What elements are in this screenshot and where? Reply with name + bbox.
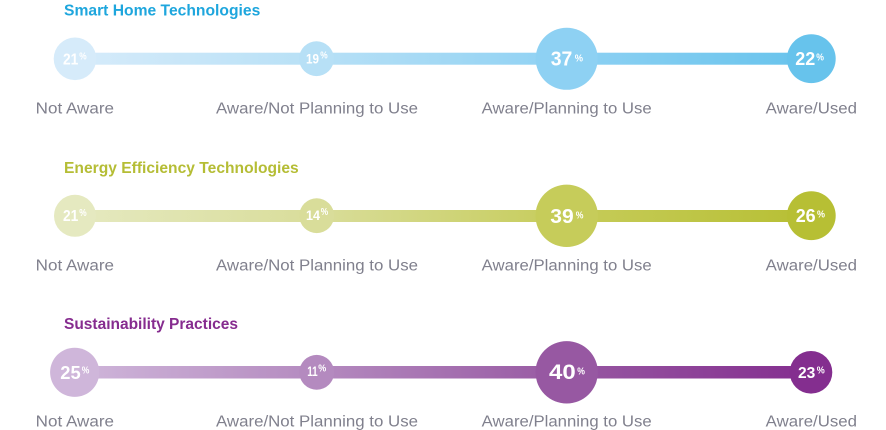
panel: Energy Efficiency Technologies — [36, 160, 857, 274]
node: Aware/Planning to Use 39%: 39 — [550, 205, 574, 228]
node: Aware/Used 23%: 23 — [798, 365, 815, 382]
node: Aware/Used 22% — [787, 34, 836, 83]
node: Aware/Planning to Use 40%: % — [577, 367, 585, 378]
node: Aware/Not Planning to Use 14%: 14 — [306, 207, 320, 223]
label: Aware/Used: Aware/Used — [766, 101, 857, 118]
node: Not Aware 21%: % — [79, 51, 87, 62]
panel: Smart Home Technologies — [36, 3, 857, 118]
node: Aware/Not Planning to Use 14%: % — [321, 207, 328, 218]
node: Aware/Used 26% — [787, 191, 836, 240]
node: Not Aware 25% — [50, 348, 99, 397]
node: Aware/Not Planning to Use 19%: % — [320, 50, 328, 61]
node: Aware/Planning to Use 40%: 40 — [549, 361, 576, 384]
node: Not Aware 21%: % — [79, 208, 87, 219]
node: Aware/Not Planning to Use 14% — [299, 198, 334, 233]
node: Aware/Not Planning to Use 11%: 11 — [307, 363, 318, 379]
panel: Sustainability Practices — [36, 316, 857, 430]
node: Aware/Planning to Use 39%: % — [576, 210, 583, 221]
node: Aware/Not Planning to Use 11%: % — [318, 363, 326, 374]
label: Aware/Planning to Use: Aware/Planning to Use — [482, 257, 652, 274]
node: Aware/Used 23%: % — [817, 365, 825, 376]
label: Aware/Not Planning to Use: Aware/Not Planning to Use — [216, 257, 418, 274]
node: Aware/Used 26%: 26 — [796, 206, 816, 226]
node: Not Aware 21%: 21 — [63, 208, 79, 225]
node: Aware/Planning to Use 37%: 37 — [551, 49, 572, 71]
node: Aware/Used 23% — [790, 351, 832, 394]
node: Aware/Planning to Use 39% — [536, 185, 598, 247]
heading: Energy Efficiency Technologies: Energy Efficiency Technologies — [64, 160, 299, 177]
label: Aware/Used: Aware/Used — [766, 257, 857, 274]
node: Aware/Used 22%: 22 — [795, 49, 815, 69]
node: Aware/Planning to Use 37% — [536, 28, 598, 90]
node: Aware/Not Planning to Use 19% — [299, 41, 334, 76]
node: Not Aware 25%: % — [82, 366, 89, 377]
node: Not Aware 25%: 25 — [60, 363, 81, 383]
node: Not Aware 21% — [54, 195, 96, 237]
heading: Sustainability Practices: Sustainability Practices — [64, 316, 238, 333]
heading: Smart Home Technologies: Smart Home Technologies — [64, 3, 260, 20]
node: Aware/Not Planning to Use 19%: 19 — [306, 50, 319, 66]
node: Not Aware 21% — [54, 38, 96, 80]
node: Aware/Planning to Use 40% — [536, 341, 598, 403]
node: Aware/Used 26%: % — [817, 209, 825, 220]
node: Aware/Used 22%: % — [816, 53, 824, 64]
label: Not Aware: Not Aware — [36, 101, 114, 118]
connector bar — [75, 366, 811, 378]
node: Aware/Not Planning to Use 11% — [299, 355, 334, 390]
connector bar — [75, 53, 811, 65]
label: Aware/Planning to Use: Aware/Planning to Use — [482, 101, 652, 118]
node: Aware/Planning to Use 37%: % — [575, 54, 583, 65]
connector bar — [75, 210, 811, 222]
label: Aware/Not Planning to Use: Aware/Not Planning to Use — [216, 101, 418, 118]
label: Not Aware: Not Aware — [36, 257, 114, 274]
node: Not Aware 21%: 21 — [63, 51, 79, 68]
